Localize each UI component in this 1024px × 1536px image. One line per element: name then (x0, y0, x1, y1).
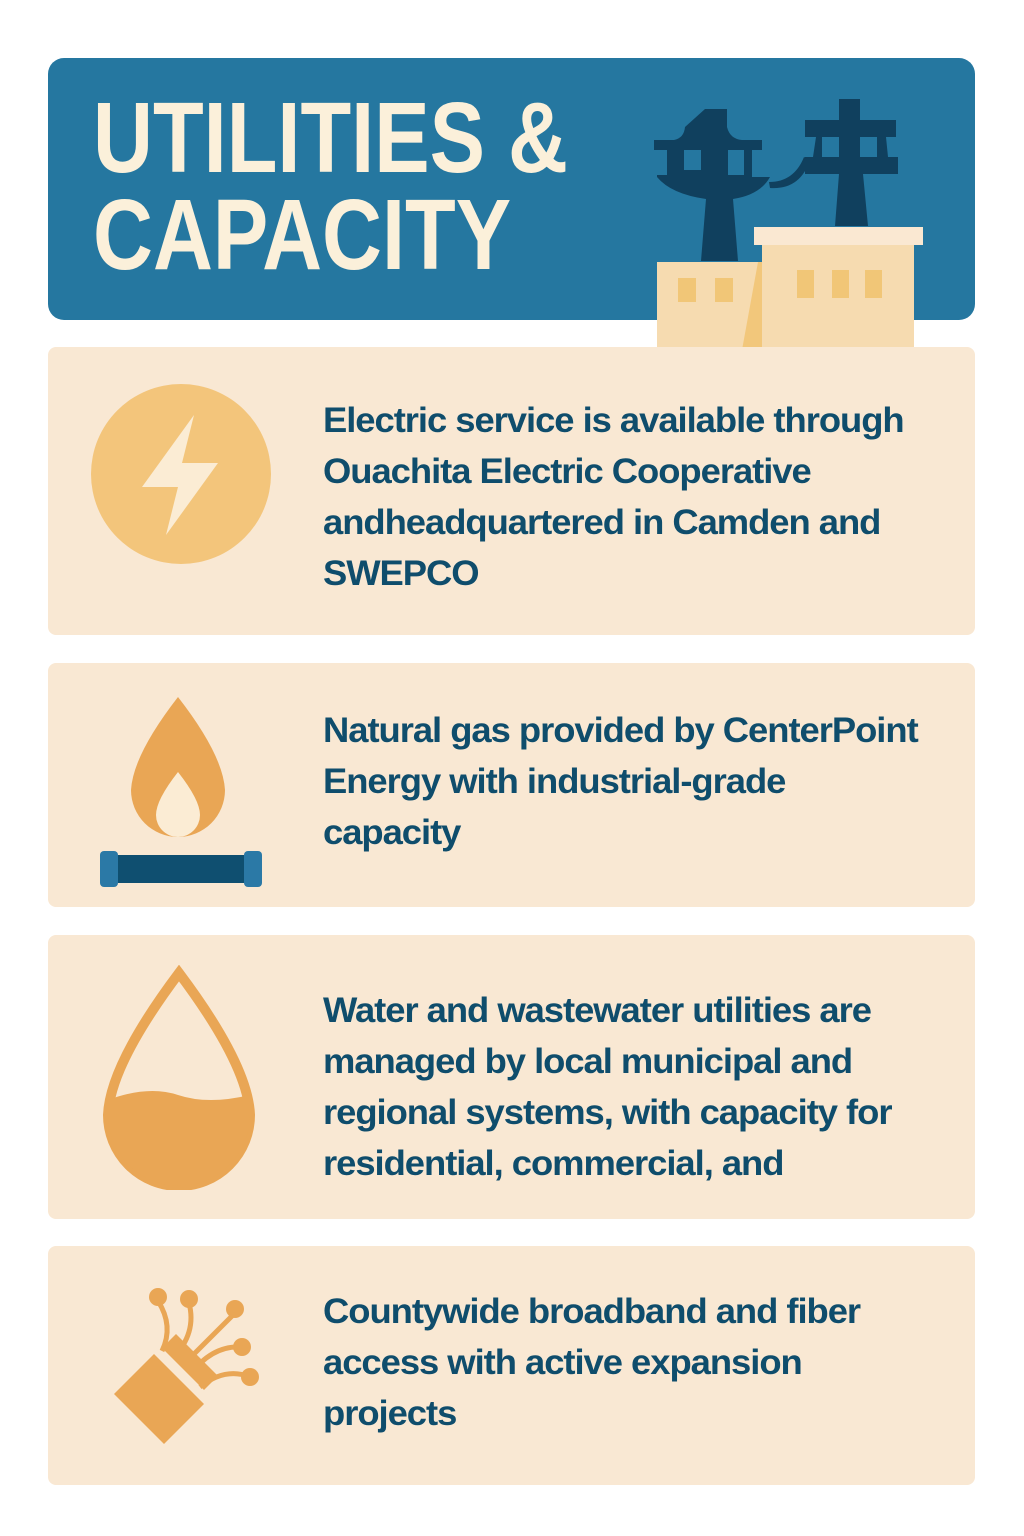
illustration: power towers and buildings (654, 99, 923, 347)
text: water (323, 991, 892, 1183)
panel: broadband (48, 1246, 975, 1485)
text: gas: Natural gas provided by CenterPoint (323, 711, 918, 750)
text: electric: SWEPCO (323, 554, 479, 593)
text: electric: andheadquartered in Camden and (323, 503, 880, 542)
text: water: Water and wastewater utilities are (323, 991, 871, 1030)
text: broadband: Countywide broadband and fiber (323, 1292, 860, 1331)
title: CAPACITY (93, 179, 511, 291)
text: gas (323, 711, 918, 852)
text: broadband (323, 1292, 860, 1433)
title: UTILITIES & (93, 82, 568, 194)
header banner (48, 58, 975, 320)
icon: water drop (103, 965, 255, 1190)
text: gas: capacity (323, 813, 460, 852)
icon: fiber cable (114, 1288, 259, 1444)
text: electric: Ouachita Electric Cooperative (323, 452, 811, 491)
panel: electric (48, 347, 975, 635)
text: water: regional systems, with capacity for (323, 1093, 891, 1132)
text: electric: Electric service is available through (323, 401, 904, 440)
text: electric (323, 401, 904, 593)
text: broadband: projects (323, 1394, 456, 1433)
text: gas: Energy with industrial-grade (323, 762, 785, 801)
text: water: managed by local municipal and (323, 1042, 852, 1081)
text: water: residential, commercial, and (323, 1144, 783, 1183)
text: broadband: access with active expansion (323, 1343, 802, 1382)
icon: lightning (91, 384, 271, 564)
icon: flame and pipe (100, 697, 262, 887)
panel: water (48, 935, 975, 1219)
title (93, 82, 568, 291)
panel: gas (48, 663, 975, 907)
